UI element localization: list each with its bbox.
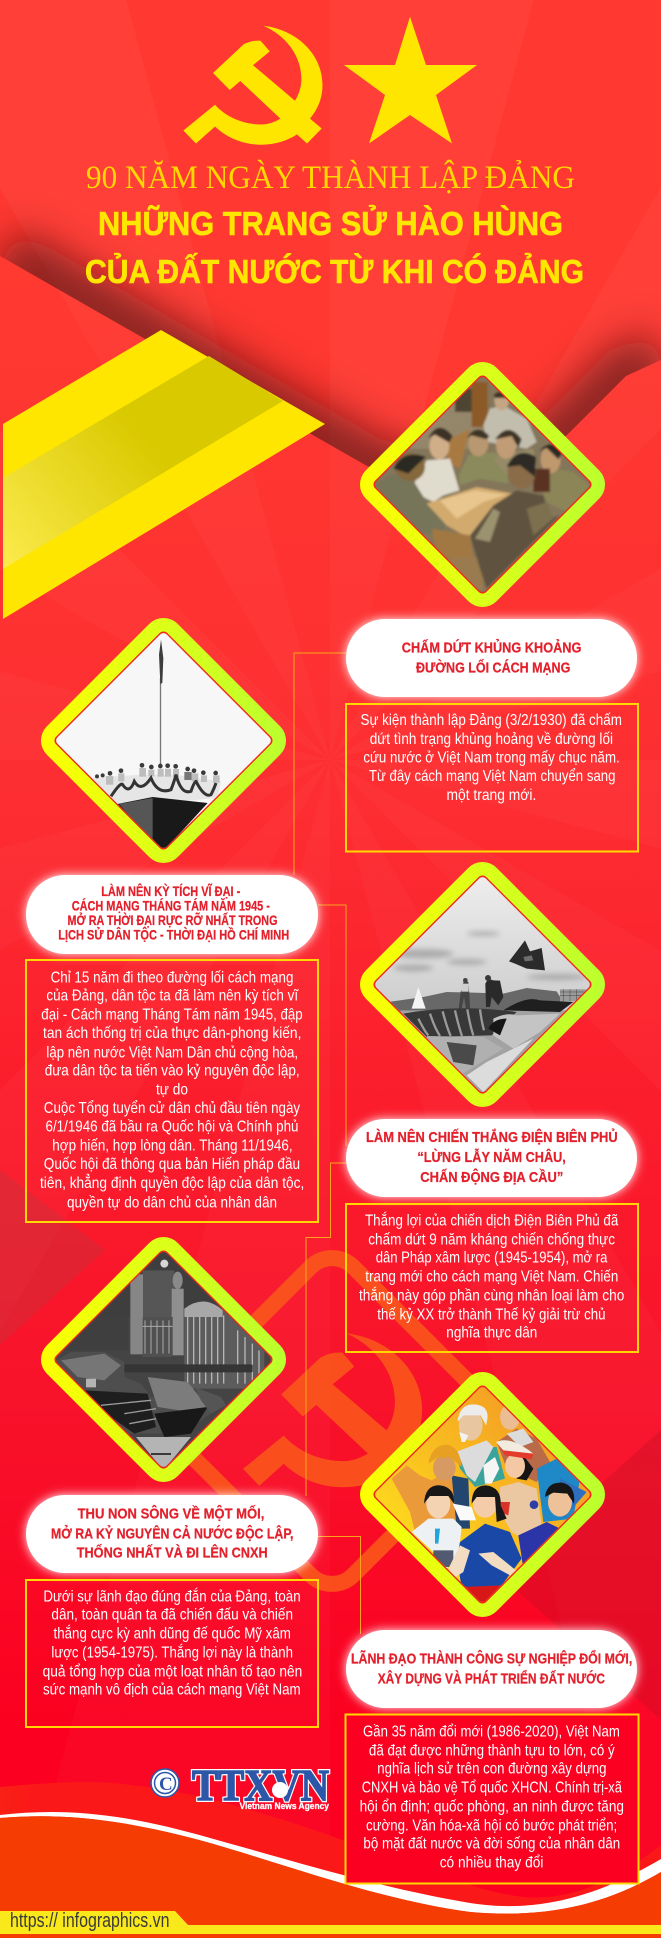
card 2 text box: 6/1/1946 đã bầu ra Quốc hội và Chính phủ <box>46 1118 298 1136</box>
card 2 text box: quyền tự do dân chủ của nhân dân <box>67 1194 277 1212</box>
title <box>85 159 584 290</box>
card 3 text box: thắng này góp phần cùng nhân loại làm cho <box>359 1286 624 1304</box>
card 4 text box: lược (1954-1975). Thắng lợi này là thành <box>51 1642 293 1662</box>
card 2 text box: tan ách thống trị của thực dân-phong kiến, <box>43 1025 301 1042</box>
card 3 text box: dân Pháp xâm lược (1945-1954), mở ra <box>376 1250 607 1266</box>
card 3 text box: nghĩa thực dân <box>446 1324 537 1342</box>
card 3 text box <box>346 1204 638 1352</box>
card 2 text box <box>26 960 318 1222</box>
card 2 heading pill: LÀM NÊN KỲ TÍCH VĨ ĐẠI - <box>101 882 241 899</box>
card 3 text box: chấm dứt 9 năm kháng chiến chống thực <box>368 1232 615 1248</box>
logo: copyright TTXVN: C <box>159 1774 173 1795</box>
card 5 text box: có nhiều thay đổi <box>440 1854 543 1872</box>
card 2 text box: Cuộc Tổng tuyển cử dân chủ đầu tiên ngày <box>44 1099 300 1117</box>
card 1 text box: dứt tình trạng khủng hoảng về đường lối <box>370 731 613 748</box>
logo: copyright TTXVN: TTXVN <box>192 1761 329 1810</box>
card 4 text box <box>26 1580 318 1727</box>
card 2 text box: của Đảng, dân tộc ta đã làm nên kỳ tích vĩ <box>46 988 299 1004</box>
card 4 text box: Dưới sự lãnh đạo đúng đắn của Đảng, toàn <box>43 1586 301 1606</box>
card 3 heading pill: CHẤN ĐỘNG ĐỊA CẦU” <box>420 1168 563 1186</box>
footer url tab: https:// infographics.vn <box>10 1910 170 1932</box>
card 5 text box: nghĩa lịch sử trên con đường xây dựng <box>377 1760 606 1778</box>
card 1 text box: một trang mới. <box>446 787 536 804</box>
footer url tab <box>0 1910 661 1934</box>
card 2 text box: Chỉ 15 năm đi theo đường lối cách mạng <box>51 970 293 986</box>
card 4 heading pill: MỞ RA KỶ NGUYÊN CẢ NƯỚC ĐỘC LẬP, <box>51 1524 293 1542</box>
connector lines <box>294 653 360 1634</box>
photo 4: tank at Independence Palace gate <box>41 1237 286 1482</box>
card 1 text box <box>346 704 638 852</box>
logo: copyright TTXVN <box>151 1761 329 1811</box>
card 3 text box: trang mới cho cách mạng Việt Nam. Chiến <box>365 1268 618 1286</box>
logo: copyright TTXVN: Vietnam News Agency <box>240 1801 329 1811</box>
card 2 text box: đưa dân tộc ta tiến vào kỷ nguyên độc lập, <box>45 1062 300 1080</box>
yellow ribbon <box>3 330 325 619</box>
card 3 heading pill <box>346 1119 637 1197</box>
card 2 text box: hợp hiến, hợp lòng dân. Tháng 11/1946, <box>52 1138 293 1154</box>
card 4 text box: quả tổng hợp của một loạt nhân tố tạo nên <box>43 1662 302 1680</box>
card 5 heading pill <box>346 1630 637 1708</box>
card 4 heading pill: THU NON SÔNG VỀ MỘT MỐI, <box>78 1504 264 1522</box>
photo 2: independence declaration stage <box>41 618 286 863</box>
card 3 text box: thế kỷ XX trở thành Thế kỷ giải trừ chủ <box>377 1306 606 1324</box>
card 2 text box: Quốc hội đã thông qua bản Hiến pháp đầu <box>44 1156 300 1173</box>
card 1 heading pill: CHẤM DỨT KHỦNG KHOẢNG <box>402 638 581 656</box>
card 5 text box: cường. Văn hóa-xã hội có bước phát triển; <box>366 1816 617 1834</box>
watermark: diamond and hammer and sickle <box>157 1246 507 1596</box>
card 2 heading pill: MỞ RA THỜI ĐẠI RỰC RỠ NHẤT TRONG <box>68 911 278 928</box>
card 5 text box: hội ổn định; quốc phòng, an ninh được tăng <box>360 1798 624 1816</box>
card 2 text box: đại - Cách mạng Tháng Tám năm 1945, đập <box>41 1006 303 1024</box>
logo: copyright TTXVN: TTXVN <box>192 1761 329 1810</box>
card 1 heading pill <box>346 619 637 697</box>
card 2 heading pill: LỊCH SỬ DÂN TỘC - THỜI ĐẠI HỒ CHÍ MINH <box>58 926 289 943</box>
photo 1: party founding painting <box>360 362 605 607</box>
photo 5: people of Vietnam poster <box>360 1372 605 1617</box>
card 3 heading pill: LÀM NÊN CHIẾN THẮNG ĐIỆN BIÊN PHỦ <box>366 1128 618 1146</box>
card 2 heading pill: CÁCH MẠNG THÁNG TÁM NĂM 1945 - <box>72 898 270 914</box>
card 3 text box: Thắng lợi của chiến dịch Điện Biên Phủ đã <box>365 1210 618 1230</box>
title: CỦA ĐẤT NƯỚC TỪ KHI CÓ ĐẢNG <box>85 253 584 290</box>
card 4 text box: sức mạnh vô địch của cách mạng Việt Nam <box>43 1682 301 1698</box>
card 4 heading pill <box>26 1495 318 1573</box>
card 3 heading pill: “LỪNG LẪY NĂM CHÂU, <box>417 1148 566 1166</box>
card 4 heading pill: THỐNG NHẤT VÀ ĐI LÊN CNXH <box>77 1544 268 1562</box>
title: NHỮNG TRANG SỬ HÀO HÙNG <box>98 205 563 242</box>
photo 3: Dien Bien Phu victory flag <box>360 862 605 1107</box>
card 4 text box: dân, toàn quân ta đã chiến đấu và chiến <box>51 1606 293 1624</box>
icon: star <box>344 17 477 144</box>
card 1 heading pill: ĐƯỜNG LỐI CÁCH MẠNG <box>416 658 570 676</box>
title: 90 NĂM NGÀY THÀNH LẬP ĐẢNG <box>86 159 575 196</box>
card 2 text box: tiên, khẳng định quyền độc lập của dân tộc, <box>40 1173 304 1192</box>
card 2 text box: tự do <box>156 1082 188 1098</box>
card 4 text box: thắng cực kỳ anh dũng đế quốc Mỹ xâm <box>54 1624 291 1642</box>
card 2 text box: lập nên nước Việt Nam Dân chủ cộng hòa, <box>46 1044 298 1062</box>
card 5 text box: đã đạt được những thành tựu to lớn, có ý <box>369 1742 615 1760</box>
footer wave: orange band and white stroke <box>0 1782 661 1938</box>
icon: hammer and sickle <box>183 26 322 145</box>
card 1 text box: Từ đây cách mạng Việt Nam chuyển sang <box>369 767 616 785</box>
card 5 text box <box>346 1714 638 1884</box>
card 2 heading pill <box>26 875 318 954</box>
card 5 heading pill: XÂY DỰNG VÀ PHÁT TRIỂN ĐẤT NƯỚC <box>378 1670 605 1688</box>
